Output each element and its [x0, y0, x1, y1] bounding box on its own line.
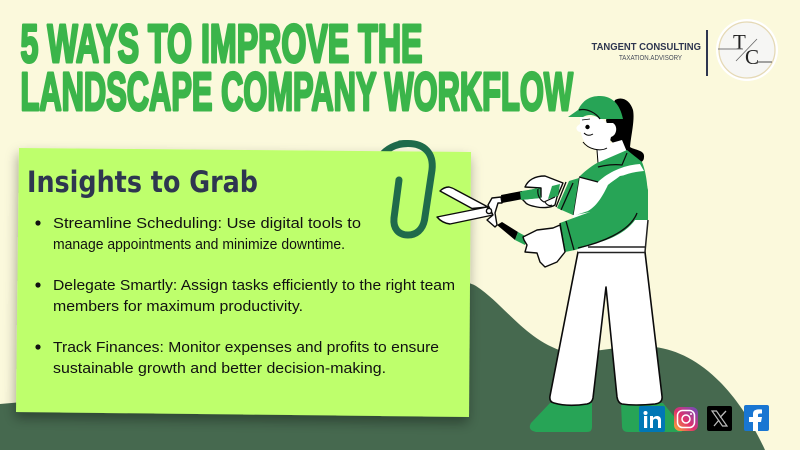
shoes [530, 403, 682, 432]
bullet 2: members for maximum productivity. [53, 298, 303, 315]
green hill [0, 281, 765, 450]
paperclip tail [378, 144, 408, 160]
white bib and band [573, 164, 644, 216]
lower sleeve [560, 172, 648, 252]
face details [582, 119, 607, 163]
logo [716, 19, 778, 81]
shears blades [437, 187, 502, 227]
lower hand [523, 225, 565, 267]
icon: x [707, 406, 732, 431]
icon: facebook [744, 405, 769, 431]
bib base [573, 180, 648, 252]
company text: TAXATION.ADVISORY [619, 55, 682, 62]
bullet 1: manage appointments and minimize downtime. [53, 236, 345, 253]
heading: Insights to Grab [27, 165, 258, 199]
sleeve lines [560, 213, 637, 252]
face [576, 117, 616, 150]
cuff lines [556, 182, 573, 210]
bullet 2: Delegate Smartly: Assign tasks efficiently to the right team [53, 277, 455, 294]
bullet 3: sustainable growth and better decision-making. [53, 360, 386, 377]
divider [706, 30, 708, 76]
torso [575, 150, 648, 220]
collar and bib lines [573, 153, 627, 215]
panel: insights [16, 148, 471, 417]
cap line [579, 110, 600, 119]
icon: linkedin [639, 406, 665, 432]
pants [550, 252, 662, 405]
bullet 1 [35, 215, 361, 253]
title [20, 15, 573, 122]
finger lines [538, 189, 555, 206]
hair [606, 98, 644, 162]
bullet 2 [35, 277, 455, 315]
upper grip [520, 184, 560, 200]
logo: T [733, 30, 746, 54]
icon: paperclip [394, 144, 432, 235]
icon: instagram [674, 407, 698, 431]
bullet 1: Streamline Scheduling: Use digital tools to [53, 215, 361, 232]
company text: TANGENT CONSULTING [592, 41, 701, 53]
upper hand [522, 176, 563, 208]
bullet 3: Track Finances: Monitor expenses and profits to ensure [53, 339, 439, 356]
gardener figure [437, 96, 682, 432]
card background [16, 148, 471, 417]
raised cuff [557, 178, 579, 215]
cap [568, 96, 623, 119]
logo: C [745, 45, 759, 69]
neck [597, 140, 627, 165]
shears handles [497, 188, 541, 245]
belt lines [578, 220, 648, 252]
bullet 3 [35, 339, 439, 377]
title: 5 WAYS TO IMPROVE THE [20, 15, 422, 74]
company text [592, 41, 701, 62]
